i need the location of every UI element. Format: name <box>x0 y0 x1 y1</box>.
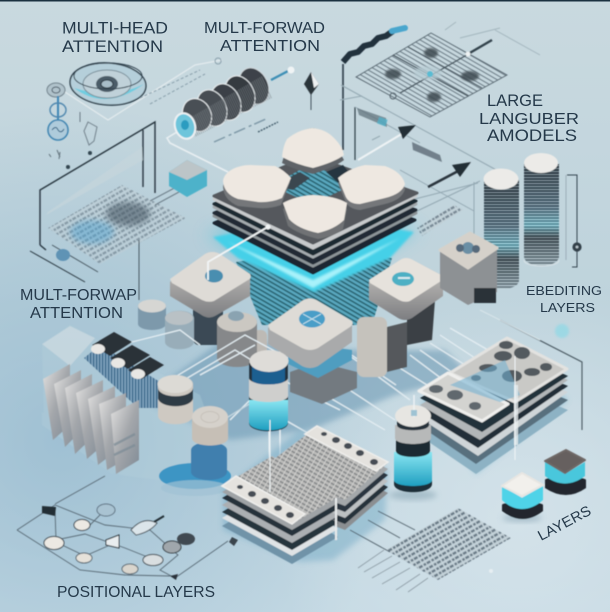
cylinder: right front tall <box>484 168 519 289</box>
icon: layer cube, back <box>545 450 586 495</box>
panel: feed-forward coil <box>167 63 294 172</box>
cylinder: right back tall <box>524 153 559 266</box>
panel: eye attention lens <box>65 60 222 120</box>
heading: embedding layers: EBEDITING <box>526 283 602 298</box>
node graph <box>17 476 238 580</box>
faint scribble line near eye <box>140 58 221 104</box>
arrow <box>358 125 416 160</box>
squiggle connector <box>343 28 405 150</box>
block: left-mid module <box>170 224 270 318</box>
heading: embedding layers <box>526 283 602 315</box>
rear deck layers <box>262 456 388 530</box>
block: centre-bottom module <box>268 298 357 404</box>
front card strip <box>222 476 305 524</box>
schematic: top-right circuit board <box>356 22 540 117</box>
traces underlay <box>140 335 470 440</box>
aperture <box>272 164 355 204</box>
front deck top hatch <box>222 456 338 524</box>
hatched data strip <box>417 205 463 236</box>
core glow <box>205 190 420 300</box>
block: small cube with flower <box>440 233 497 305</box>
lobe: right <box>338 169 405 210</box>
hatched data field bottom right <box>350 508 511 592</box>
heading: multi-head attention: ATTENTION <box>62 37 163 56</box>
teal circuit beneath <box>236 250 392 325</box>
cylinder: tall centre <box>249 350 288 470</box>
heading: mult-forwad attention: ATTENTION <box>220 38 320 55</box>
panel: central core stack <box>205 128 420 325</box>
panel: centre card stack <box>222 420 388 564</box>
layers <box>214 183 415 273</box>
rear deck top hatch <box>262 426 388 500</box>
icon: smudged marks <box>357 108 442 162</box>
icon: layer cube, front <box>502 473 543 522</box>
heading: large language models <box>479 91 579 145</box>
heading: mult-forwap attention: MULT-FORWAP <box>20 287 137 304</box>
panel: attention screen with data field <box>30 122 190 300</box>
lobe: left <box>223 168 290 208</box>
top card front <box>419 373 508 421</box>
lobe: bottom <box>283 200 347 239</box>
front deck layers <box>222 496 338 564</box>
heading: mult-forwap attention: ATTENTION <box>30 305 123 322</box>
heading: large language models: LARGE <box>487 91 543 110</box>
icon: small attention nodes <box>47 83 97 169</box>
top card rear <box>450 338 567 402</box>
rear card strip <box>305 426 388 471</box>
top card icons <box>471 341 552 382</box>
heading: mult-forwap attention <box>20 287 137 322</box>
heading: positional layers: POSITIONAL LAYERS <box>57 584 215 601</box>
circuit traces <box>100 328 488 470</box>
block: mid column <box>138 300 267 367</box>
heading: large language models: AMODELS <box>487 126 577 145</box>
cylinder: right small <box>389 395 437 500</box>
cylinders: middle pair <box>158 375 231 496</box>
heading: embedding layers: LAYERS <box>540 300 595 315</box>
callouts: thin frame lines right of the core <box>340 85 500 275</box>
icon: small cyan block <box>169 160 207 197</box>
heading: large language models: LANGUBER <box>479 111 579 128</box>
icon: diamond marker <box>304 72 319 110</box>
vertical slider line <box>566 175 582 267</box>
data field <box>48 185 186 264</box>
block: right-mid module <box>357 258 444 377</box>
heading: multi-head attention <box>62 18 168 56</box>
lobe: top <box>282 128 344 174</box>
light panel: lower plate <box>42 325 235 490</box>
heading: mult-forwad attention <box>204 20 325 55</box>
panel: vertical fins <box>42 364 139 474</box>
panel: right card stack <box>419 310 582 474</box>
heading: multi-head attention: MULTI-HEAD <box>62 18 168 38</box>
heading: mult-forwad attention: MULT-FORWAD <box>204 20 325 37</box>
label: layers: LAYERS <box>535 503 594 545</box>
panel: circuit modules with bristles <box>42 326 165 408</box>
cyan band <box>213 228 414 292</box>
front card icons <box>429 385 481 410</box>
arrow <box>428 162 471 187</box>
